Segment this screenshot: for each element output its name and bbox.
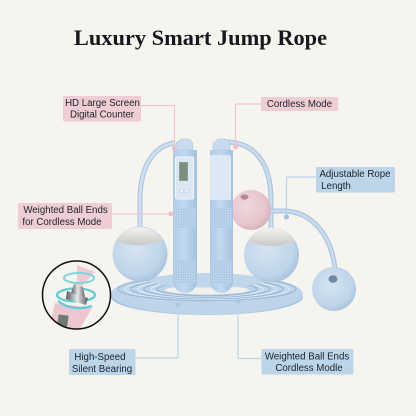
left handle [173,139,197,293]
outer rope to small ball [268,211,335,268]
callout: high-speed silent bearing [69,302,180,375]
callout: high-speed silent bearing: Silent Bearing [72,364,132,375]
small blue ball [312,267,356,311]
pink ball [231,190,271,230]
right rope to ball [228,142,271,230]
right weighted ball [244,228,299,282]
title: Luxury Smart Jump Rope [74,25,327,50]
callout: weighted ball ends cordless [236,298,354,374]
coiled rope mat [111,273,303,315]
callout: adjustable rope length: Adjustable Rope [319,169,391,180]
callout: weighted ball ends cordless: Weighted Ball Ends [265,352,349,362]
left rope to ball [140,143,175,228]
callout: weighted ball ends left: Weighted Ball Ends [23,205,108,216]
callout: HD large screen [63,96,177,150]
callout: adjustable rope length: Length [321,181,351,192]
left weighted ball [112,226,168,282]
callout: weighted ball ends left: for Cordless Mode [22,217,102,228]
callout: adjustable rope length [284,167,395,220]
inset: high-speed bearing [42,260,111,332]
callout: HD large screen: HD Large Screen [65,98,140,109]
right handle [210,139,233,293]
callout: weighted ball ends cordless: Cordless Modle [275,363,343,374]
blank panel [210,155,231,200]
callout: cordless mode [233,97,338,150]
callout: weighted ball ends left [18,203,174,229]
screen panel [176,157,194,199]
callout: cordless mode: Cordless Mode [267,99,332,110]
callout: high-speed silent bearing: High-Speed [74,352,126,363]
callout: HD large screen: Digital Counter [70,110,135,120]
